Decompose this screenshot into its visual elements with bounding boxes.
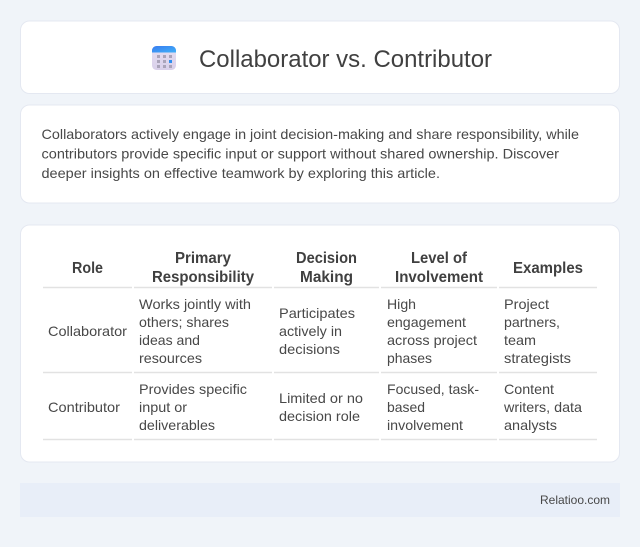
footer: [20, 483, 620, 517]
table row: contributor: based: [387, 399, 425, 415]
table header row: Involvement: [395, 269, 484, 286]
intro text: deeper insights on effective teamwork by exploring this article.: [42, 165, 440, 181]
table header row: Primary: [175, 250, 231, 267]
table row: collaborator: others; shares: [139, 314, 229, 330]
table row: contributor: involvement: [387, 417, 463, 433]
table row: contributor: analysts: [504, 417, 557, 433]
panel: comparison table: [20, 225, 620, 462]
intro text: contributors provide specific input or support without shared ownership. Discover: [42, 146, 559, 162]
table row: contributor: Limited or no: [279, 390, 363, 406]
table row: collaborator: ideas and: [139, 332, 200, 348]
title text: Collaborator vs. Contributor: [199, 46, 492, 73]
table row: collaborator: Collaborator: [48, 323, 127, 339]
table row: contributor: Content: [504, 381, 554, 397]
table row: collaborator: Works jointly with: [139, 296, 251, 312]
table header row: Role: [72, 260, 103, 277]
panel: intro: [20, 105, 620, 203]
footer source text: Relatioo.com: [540, 493, 610, 507]
table row: collaborator: partners,: [504, 314, 560, 330]
intro text: [42, 126, 579, 181]
table row: collaborator: Project: [504, 296, 549, 312]
table row: contributor: writers, data: [503, 399, 582, 415]
table header row: Responsibility: [152, 269, 254, 286]
table row: contributor: deliverables: [139, 417, 215, 433]
table row: collaborator: across project: [387, 332, 477, 348]
icon: calendar: [152, 46, 176, 70]
table row: collaborator: engagement: [387, 314, 466, 330]
table row: contributor: Focused, task-: [387, 381, 479, 397]
table row: contributor: input or: [139, 399, 187, 415]
table row: collaborator: [48, 296, 571, 366]
table row: collaborator: Participates: [279, 305, 355, 321]
panel: title: [20, 21, 620, 94]
table row: collaborator: resources: [139, 350, 202, 366]
table row: collaborator: decisions: [279, 341, 340, 357]
table header row: Making: [300, 269, 353, 286]
table row: contributor: decision role: [279, 408, 360, 424]
table header row: Decision: [296, 250, 357, 267]
intro text: Collaborators actively engage in joint decision-making and share responsibility, while: [42, 126, 579, 142]
table row: collaborator: team: [504, 332, 536, 348]
table row: contributor: Provides specific: [139, 381, 247, 397]
table row: collaborator: phases: [387, 350, 432, 366]
table header row: Examples: [513, 260, 583, 277]
table row: contributor: Contributor: [48, 399, 120, 415]
table header row: [72, 250, 583, 286]
table header row: Level of: [411, 250, 468, 267]
table row: collaborator: actively in: [279, 323, 342, 339]
table row: collaborator: strategists: [504, 350, 571, 366]
table row: collaborator: High: [387, 296, 416, 312]
table row: contributor: [48, 381, 582, 433]
